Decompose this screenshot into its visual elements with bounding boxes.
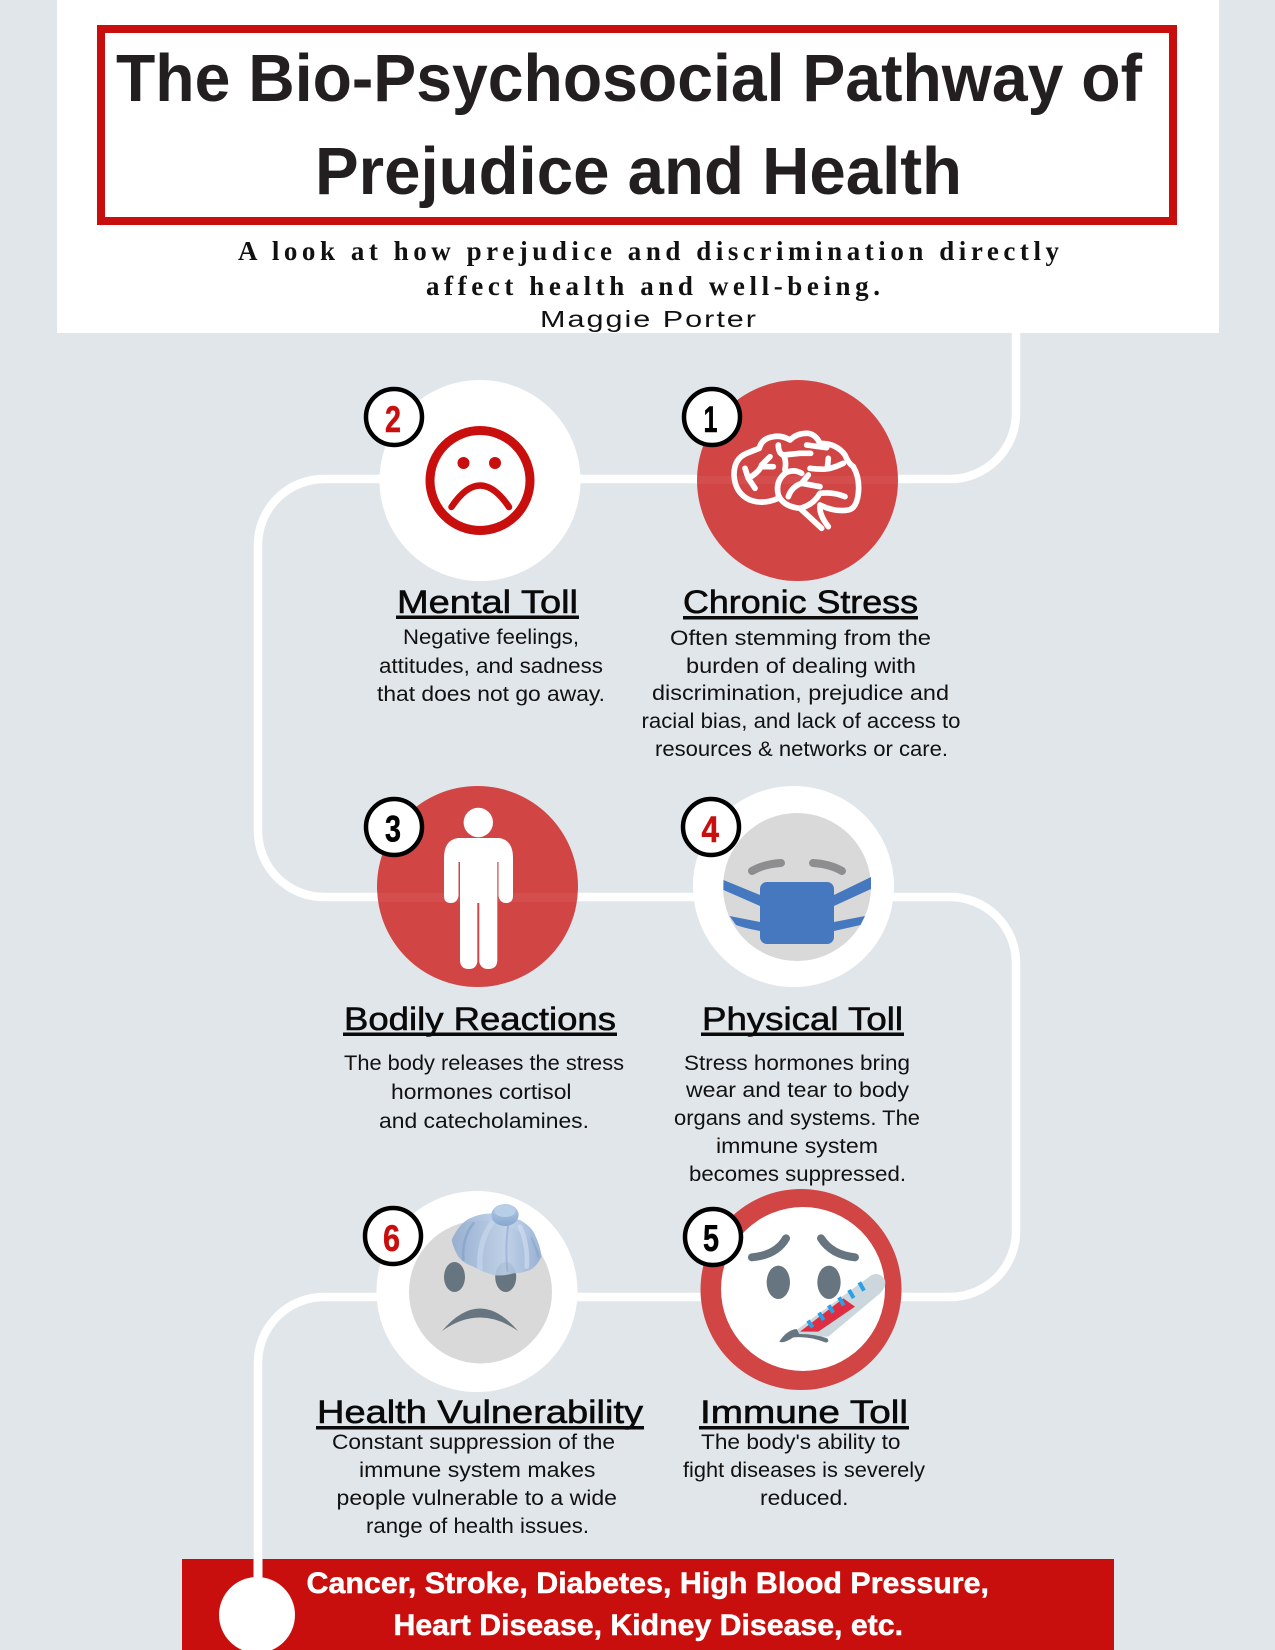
- icon: face with ice pack: [376, 1191, 578, 1392]
- text: chronic stress: racial bias, and lack of access to: [642, 710, 960, 733]
- badge 4: [683, 799, 739, 855]
- badge 1: [684, 389, 740, 445]
- icon: brain: [697, 380, 898, 581]
- text: physical toll: organs and systems. The: [674, 1107, 920, 1130]
- step 4: physical toll: [674, 786, 920, 1186]
- step 6: health vulnerability: [316, 1191, 644, 1538]
- text: physical toll: [674, 1052, 920, 1186]
- title: The Bio-Psychosocial Pathway of: [116, 41, 1143, 116]
- pathway line: [258, 320, 1016, 1600]
- text: mental toll: that does not go away.: [377, 683, 605, 706]
- title: [116, 41, 1143, 209]
- text: physical toll: wear and tear to body: [685, 1079, 910, 1102]
- badge 3: [366, 799, 422, 855]
- text: chronic stress: resources & networks or care.: [655, 738, 948, 761]
- heading: health vulnerability: Health Vulnerability: [317, 1394, 643, 1430]
- pathway end dot: [219, 1577, 295, 1650]
- text: immune toll: [683, 1431, 926, 1510]
- icon: sad face: [380, 380, 580, 581]
- text: physical toll: immune system: [716, 1135, 878, 1158]
- banner text: Cancer, Stroke, Diabetes, High Blood Pressure,: [306, 1567, 989, 1600]
- icon: human body: [377, 786, 578, 987]
- text: immune toll: fight diseases is severely: [683, 1459, 926, 1482]
- text: physical toll: Stress hormones bring: [684, 1052, 910, 1075]
- text: immune toll: The body's ability to: [701, 1431, 900, 1454]
- heading: immune toll: Immune Toll: [700, 1394, 908, 1430]
- icon: face with mask: [693, 786, 894, 987]
- text: mental toll: Negative feelings,: [403, 626, 579, 649]
- text: chronic stress: burden of dealing with: [686, 655, 916, 678]
- step 1: chronic stress: [642, 380, 960, 761]
- text: health vulnerability: people vulnerable to a wide: [336, 1487, 617, 1510]
- text: health vulnerability: immune system makes: [359, 1459, 596, 1482]
- text: chronic stress: Often stemming from the: [670, 627, 931, 650]
- title: Prejudice and Health: [315, 134, 962, 209]
- badge 4: 4: [702, 809, 719, 850]
- badge 3: 3: [385, 808, 401, 850]
- subtitle: A look at how prejudice and discrimination directly: [238, 236, 1060, 266]
- outcome banner: [182, 1559, 1114, 1650]
- text: mental toll: [377, 626, 605, 706]
- text: bodily reactions: hormones cortisol: [391, 1081, 572, 1104]
- heading: physical toll: Physical Toll: [702, 1001, 903, 1037]
- text: health vulnerability: Constant suppression of the: [332, 1431, 615, 1454]
- subtitle: affect health and well-being.: [426, 271, 880, 301]
- text: health vulnerability: range of health issues.: [366, 1515, 589, 1538]
- text: bodily reactions: [344, 1052, 624, 1133]
- heading: chronic stress: Chronic Stress: [683, 584, 918, 620]
- text: physical toll: becomes suppressed.: [689, 1163, 906, 1186]
- badge 2: 2: [385, 399, 401, 440]
- subtitle: [238, 236, 1060, 301]
- text: bodily reactions: and catecholamines.: [379, 1110, 589, 1133]
- text: chronic stress: [642, 627, 960, 761]
- badge 5: [685, 1209, 741, 1265]
- header panel: [57, 0, 1219, 333]
- banner text: [306, 1567, 989, 1642]
- heading: mental toll: Mental Toll: [397, 584, 578, 620]
- badge 6: [365, 1208, 421, 1264]
- pathway end line: [254, 1559, 262, 1589]
- text: chronic stress: discrimination, prejudice and: [652, 682, 949, 705]
- text: health vulnerability: [332, 1431, 617, 1538]
- text: immune toll: reduced.: [760, 1487, 848, 1510]
- text: bodily reactions: The body releases the stress: [344, 1052, 624, 1075]
- badge 6: 6: [383, 1218, 400, 1259]
- step 2: mental toll: [366, 380, 605, 706]
- title frame: [101, 29, 1173, 221]
- author: Maggie Porter: [540, 306, 758, 332]
- badge 2: [366, 389, 422, 445]
- text: mental toll: attitudes, and sadness: [379, 655, 603, 678]
- step 5: immune toll: [683, 1189, 926, 1510]
- step 3: bodily reactions: [343, 786, 624, 1133]
- badge 5: 5: [703, 1218, 719, 1259]
- banner text: Heart Disease, Kidney Disease, etc.: [394, 1609, 903, 1642]
- badge 1: 1: [704, 399, 718, 440]
- icon: face with thermometer: [700, 1189, 902, 1390]
- heading: bodily reactions: Bodily Reactions: [344, 1001, 616, 1037]
